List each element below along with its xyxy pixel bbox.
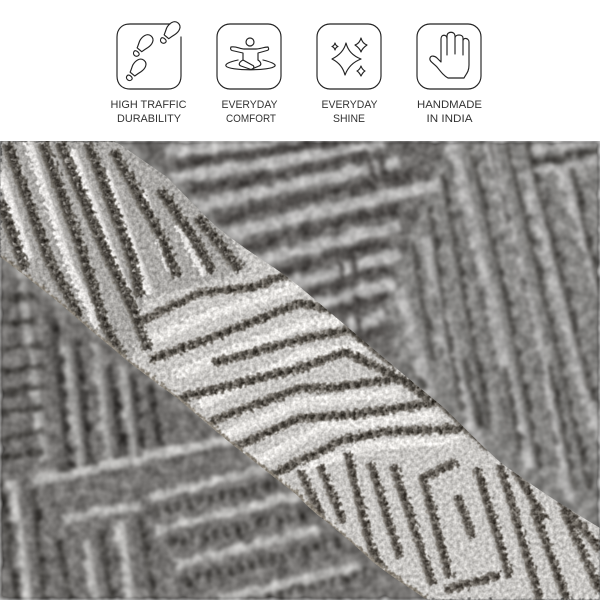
left panel of roll: mid-tone base xyxy=(0,141,250,370)
upper block: dark base xyxy=(130,141,445,370)
centre panel: dark arc stripes xyxy=(143,270,490,478)
label: everyday comfort xyxy=(222,99,278,125)
lower-left block: vertical stripes xyxy=(53,320,160,468)
icon: seated meditating figure, everyday comfort xyxy=(217,24,281,89)
icon: footprints, high traffic durability xyxy=(117,19,182,89)
label: high traffic durability xyxy=(110,99,187,125)
rolled rug in the foreground xyxy=(0,141,600,600)
label: high traffic durability: HIGH TRAFFIC xyxy=(110,99,187,111)
feature labels xyxy=(110,99,482,125)
left panel: dark chevron stripes xyxy=(0,143,240,365)
rug background, out of focus xyxy=(0,133,600,600)
centre panel: bright arc highlights xyxy=(150,286,460,470)
upper block: dark bands xyxy=(175,133,425,345)
feature icons row xyxy=(117,19,481,89)
lower block: dark base xyxy=(0,260,430,600)
rug photo illustration xyxy=(0,133,600,600)
label: handmade in India xyxy=(417,99,482,125)
label: everyday comfort: EVERYDAY xyxy=(222,99,278,111)
label: everyday comfort: COMFORT xyxy=(226,113,276,125)
icon: raised hand, handmade in India xyxy=(417,24,481,89)
icon: sparkles, everyday shine xyxy=(317,24,381,89)
label: handmade in India: HANDMADE xyxy=(417,99,482,111)
label: everyday shine: EVERYDAY xyxy=(322,99,378,111)
lower-left block: light vertical stripes xyxy=(20,270,133,465)
upper block: light bands xyxy=(165,136,440,332)
lower-left block: light bands xyxy=(12,438,360,600)
lower selvedge of roll xyxy=(0,257,427,600)
top-right corner bands xyxy=(530,140,600,172)
right panel: dark stripes and square spiral xyxy=(300,452,600,600)
label: everyday shine xyxy=(322,99,378,125)
right block: near-vertical stripes xyxy=(400,141,600,500)
lower-left block: dark ticks xyxy=(60,446,375,600)
left panel: light chevron stripes xyxy=(0,141,205,330)
label: high traffic durability: DURABILITY xyxy=(117,113,182,125)
label: handmade in India: IN INDIA xyxy=(426,113,473,125)
label: everyday shine: SHINE xyxy=(333,113,365,125)
